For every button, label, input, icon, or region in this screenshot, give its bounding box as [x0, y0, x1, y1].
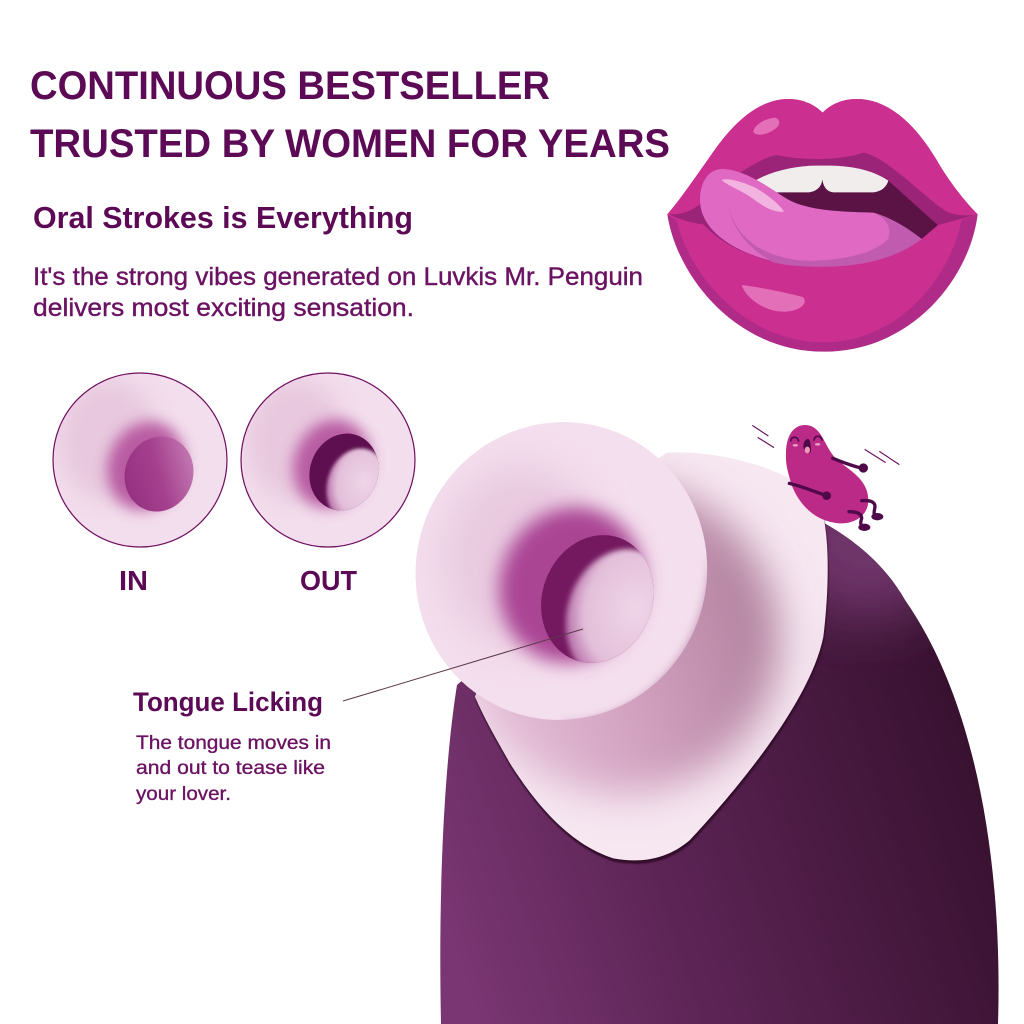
label: IN: IN	[119, 565, 148, 596]
circle: tongue out	[241, 373, 415, 547]
body text	[33, 263, 643, 322]
subheading: Oral Strokes is Everything	[33, 200, 413, 235]
title: TRUSTED BY WOMEN FOR YEARS	[30, 122, 670, 166]
leader line	[343, 629, 583, 701]
callout text	[136, 732, 331, 805]
body text: It's the strong vibes generated on Luvkis Mr. Penguin	[33, 263, 643, 291]
callout text: The tongue moves in	[136, 732, 331, 754]
icon: bean mascot	[752, 425, 899, 531]
body text: delivers most exciting sensation.	[33, 294, 414, 322]
circle: tongue in	[53, 373, 227, 547]
device body	[440, 524, 999, 1024]
title: CONTINUOUS BESTSELLER	[30, 64, 550, 108]
device plate	[474, 452, 829, 864]
icon: lips with tongue	[667, 99, 978, 352]
callout heading: Tongue Licking	[133, 687, 323, 717]
callout text: and out to tease like	[136, 757, 325, 779]
callout text: your lover.	[136, 783, 231, 805]
device funnel	[416, 422, 708, 720]
title	[30, 64, 670, 166]
label: OUT: OUT	[300, 565, 357, 596]
